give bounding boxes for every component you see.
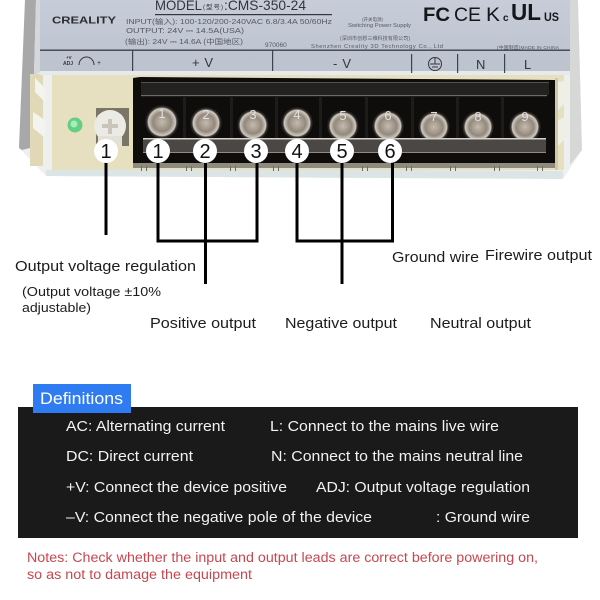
output labels: Ground wire — [392, 250, 479, 266]
circuit board — [30, 74, 52, 166]
certification marks: FC — [423, 5, 450, 26]
output labels: Output voltage regulation — [15, 259, 196, 275]
notes: Notes: Check whether the input and output leads are correct before powering on, — [27, 550, 538, 565]
output labels: Positive output — [150, 316, 256, 332]
power supply photo — [19, 0, 582, 179]
output labels — [15, 248, 592, 332]
terminal labels: +V — [66, 55, 72, 60]
terminal labels: + V — [192, 55, 213, 70]
board clips — [35, 78, 45, 102]
ratings text: 970060 — [265, 42, 287, 49]
metal casing — [19, 0, 582, 179]
definition entries: DC: Direct current — [66, 448, 194, 465]
output labels: Firewire output — [485, 248, 592, 264]
LED — [68, 118, 82, 132]
definitions tab — [33, 384, 131, 413]
terminal block — [133, 77, 555, 171]
screw numbers: 2 — [202, 107, 210, 122]
definition entries: N: Connect to the mains neutral line — [271, 448, 523, 465]
notes: so as not to damage the equipment — [27, 567, 252, 582]
output labels: Negative output — [285, 316, 397, 332]
definition entries: –V: Connect the negative pole of the device — [66, 509, 372, 526]
screw seats — [183, 96, 504, 138]
certification marks: CE — [454, 5, 481, 26]
label plate — [40, 0, 570, 75]
ratings text: Shenzhen Creality 3D Technology Co., Ltd — [311, 44, 443, 50]
adjustment screw — [94, 108, 129, 146]
terminal labels: + — [97, 60, 101, 67]
definition entries: ADJ: Output voltage regulation — [316, 479, 530, 496]
screws — [145, 105, 541, 143]
transparent cover strip — [143, 139, 546, 153]
numbered markers: 2 — [199, 141, 211, 163]
numbered markers — [94, 139, 402, 163]
screw numbers: 4 — [293, 107, 301, 122]
ratings text: (输出): 24V ⎓ 14.6A (中国地区) — [125, 37, 243, 46]
numbered markers: 6 — [384, 141, 396, 163]
screw numbers: 9 — [521, 109, 529, 124]
numbered markers: 4 — [291, 141, 303, 163]
definition entries: : Ground wire — [436, 509, 530, 526]
certification marks: c — [503, 13, 509, 24]
numbered markers: 1 — [152, 141, 164, 163]
output labels: adjustable) — [22, 300, 91, 315]
ratings text: OUTPUT: 24V ⎓ 14.5A(USA) — [126, 28, 244, 35]
terminal labels: ADJ — [63, 61, 73, 67]
definition entries: +V: Connect the device positive — [66, 479, 287, 496]
definition entries: AC: Alternating current — [66, 418, 226, 435]
screw numbers — [158, 106, 529, 124]
bottom pins — [141, 166, 543, 171]
screw numbers: 3 — [249, 107, 257, 122]
panel: definitions — [18, 384, 578, 538]
screw numbers: 5 — [339, 108, 347, 123]
ratings text: (中国制造)MADE IN CHINA — [497, 44, 560, 51]
certification marks: US — [544, 10, 559, 24]
ratings text — [125, 16, 560, 51]
certification marks — [423, 0, 559, 26]
definitions tab: Definitions — [40, 390, 123, 408]
output labels: Neutral output — [430, 316, 531, 332]
screw numbers: 6 — [384, 108, 392, 123]
numbered markers: 3 — [250, 141, 262, 163]
terminal labels: - V — [333, 56, 351, 71]
model number: (型号) — [203, 2, 223, 11]
connector lines — [106, 160, 392, 284]
definition entries: L: Connect to the mains live wire — [270, 418, 499, 435]
model number — [155, 0, 332, 15]
ratings text: (深圳市创想三维科技有限公司) — [340, 35, 410, 42]
logo: CREALITY — [52, 14, 116, 26]
ratings text: Switching Power Supply — [348, 23, 411, 29]
terminal labels: N — [476, 57, 485, 72]
notes — [27, 550, 538, 582]
certification marks: K — [486, 5, 500, 26]
ratings text: (开关电源) — [362, 16, 383, 23]
screw numbers: 7 — [430, 109, 438, 124]
numbered markers: 1 — [100, 141, 112, 163]
ratings text: INPUT(输入): 100-120/200-240VAC 6.8/3.4A 50/60Hz — [126, 17, 333, 26]
terminal labels — [63, 55, 531, 72]
screw numbers: 8 — [474, 109, 482, 124]
terminal labels: L — [524, 57, 531, 72]
screw numbers: 1 — [158, 106, 166, 121]
definition entries — [66, 418, 530, 526]
numbered markers: 5 — [336, 141, 348, 163]
output labels: (Output voltage ±10% — [22, 284, 161, 299]
